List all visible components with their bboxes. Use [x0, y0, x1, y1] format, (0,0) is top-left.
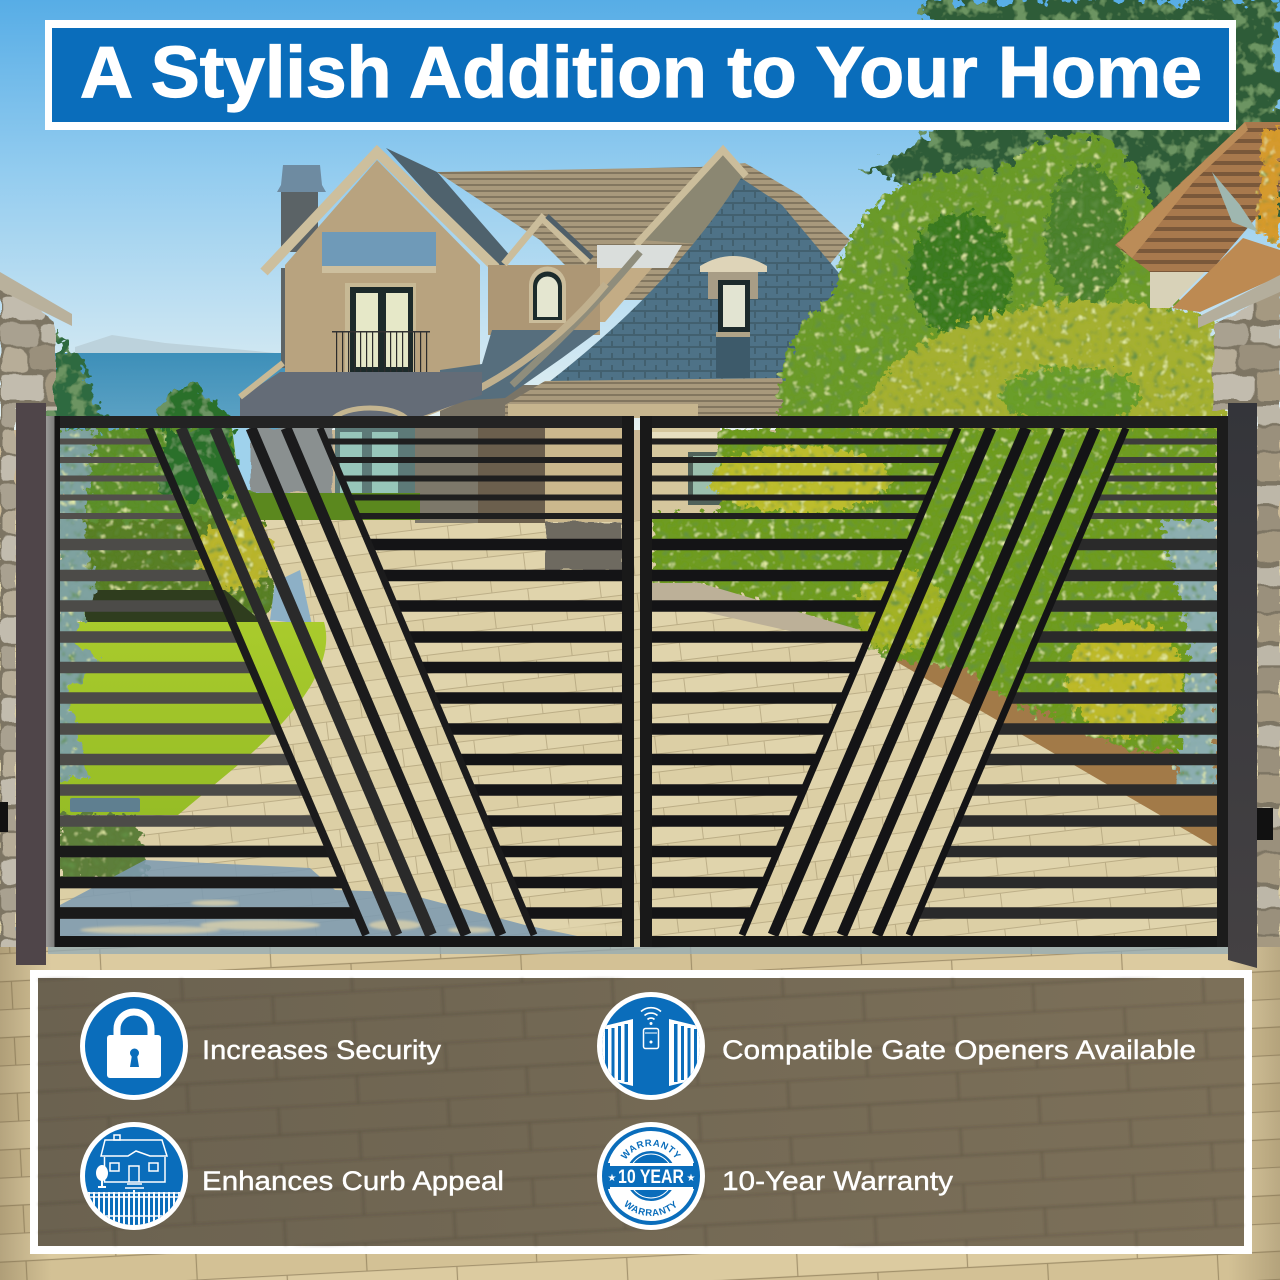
icon: house with fence — [80, 1122, 188, 1230]
paving in front of gate — [0, 947, 1280, 1280]
left trees behind pillar — [48, 330, 240, 500]
back stone gable — [636, 150, 746, 245]
title banner — [45, 20, 1236, 130]
stone curb — [652, 583, 860, 640]
text: increases security: Increases Security — [202, 1035, 442, 1065]
mulch bed — [885, 655, 1217, 846]
house — [240, 148, 858, 420]
sky — [0, 0, 1280, 430]
lower tan roof — [505, 378, 792, 418]
chimney — [277, 165, 326, 368]
slate dormer window — [700, 256, 767, 378]
house infill under eaves — [440, 385, 590, 418]
left stone pillar — [0, 272, 72, 972]
left gate diagonal bars — [149, 428, 534, 935]
dormer — [488, 216, 600, 335]
right gate diagonal bars — [742, 428, 1126, 935]
back trees top right — [862, 0, 1280, 215]
right gate inner bars — [652, 438, 950, 919]
small slate roof — [440, 330, 600, 402]
shadow below gate — [48, 947, 1228, 954]
text: compatible gate openers: Compatible Gate Openers Available — [722, 1035, 1196, 1065]
text: enhances curb appeal: Enhances Curb Appeal — [202, 1166, 504, 1196]
gate posts — [0, 403, 1273, 968]
scenery seen through right gate panel — [652, 428, 1217, 790]
white awning — [597, 245, 682, 322]
curved eave — [420, 252, 640, 415]
icon: padlock — [80, 992, 188, 1100]
icon: 10 year warranty badge: ★ — [687, 1173, 696, 1184]
features panel — [30, 970, 1252, 1254]
stone base — [240, 363, 482, 420]
back tan roof — [437, 163, 850, 300]
icon: 10 year warranty badge — [597, 1122, 705, 1230]
scenery seen through left gate panel — [57, 428, 622, 625]
icon: 10 year warranty badge: WARRANTY — [624, 1200, 676, 1216]
distant coastline and sea — [50, 335, 290, 493]
large slate roof — [545, 178, 858, 385]
gate — [0, 416, 1280, 947]
left gate inner bars — [328, 438, 622, 919]
shrub by the driveway — [60, 798, 150, 880]
left gate horizontal bars — [60, 438, 355, 919]
icon: 10 year warranty badge: WARRANTY — [620, 1140, 681, 1159]
neighbouring house roof — [1115, 122, 1280, 312]
right stone pillar — [1198, 275, 1280, 975]
icon: 10 year warranty badge: 10 YEAR — [618, 1167, 684, 1188]
icon: 10 year warranty badge: ★ — [608, 1173, 617, 1184]
mid green trees right — [779, 134, 1225, 430]
icon: gate opener with wifi remote — [597, 992, 705, 1100]
driveway shadow — [0, 860, 640, 960]
driveway ground — [0, 520, 1280, 960]
lawn — [57, 622, 326, 815]
text: 10-year warranty: 10-Year Warranty — [722, 1166, 954, 1196]
right gate outer bars — [920, 438, 1217, 919]
gate frame — [46, 416, 1228, 947]
title: A Stylish Addition to Your Home — [80, 33, 1202, 113]
blue spruce left — [57, 430, 100, 780]
main gable — [264, 148, 512, 390]
